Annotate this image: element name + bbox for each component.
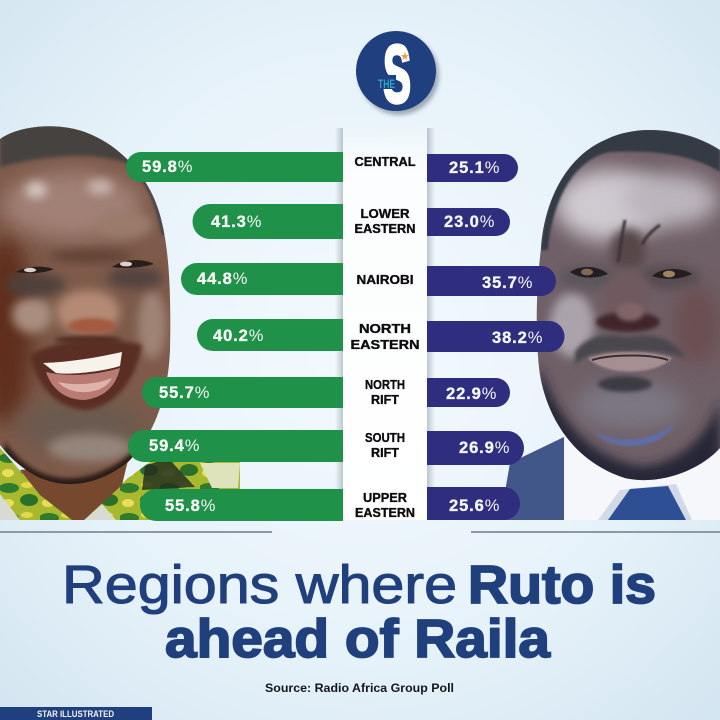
head: [0, 126, 170, 484]
bar: North Eastern Ruto: [197, 319, 343, 351]
label: Lower Eastern: [354, 207, 416, 236]
chart: Ruto bars (green): [126, 152, 343, 521]
shirt: [564, 430, 720, 520]
bar: Nairobi Ruto: 44.8%: [197, 270, 248, 288]
bar: Lower Eastern Ruto: 41.3%: [211, 213, 262, 231]
label: Upper Eastern: UPPER: [363, 491, 407, 505]
mouth: [30, 340, 142, 410]
head: [530, 120, 720, 490]
tie: [608, 486, 686, 520]
label: Central: CENTRAL: [354, 155, 416, 169]
label: North Eastern: [350, 322, 420, 352]
nose: [56, 290, 120, 334]
bar: North Rift Raila: [427, 378, 510, 407]
bar: North Rift Raila: 22.9%: [446, 385, 497, 403]
label: North Rift: RIFT: [371, 393, 399, 407]
title: Regions where: [62, 555, 457, 615]
moustache: [575, 335, 686, 365]
photo: William Ruto portrait: [0, 120, 240, 520]
label: South Rift: RIFT: [371, 446, 399, 460]
logo: The Star: S: [383, 29, 411, 120]
bar: North Eastern Raila: [427, 321, 564, 352]
credit bar: Star Illustrated: STAR ILLUSTRATED: [37, 709, 114, 719]
shirt: [0, 448, 240, 520]
label: Nairobi: NAIROBI: [356, 273, 414, 287]
bar: Nairobi Ruto: [181, 263, 343, 295]
bar: Upper Eastern Raila: 25.6%: [449, 497, 500, 515]
bar: Central Ruto: [126, 152, 343, 182]
label: Upper Eastern: [355, 491, 415, 520]
bar: North Eastern Ruto: 40.2%: [213, 327, 264, 345]
label: North Rift: [365, 378, 405, 407]
hair: [541, 129, 720, 250]
chart: Raila bars (navy): [427, 154, 564, 520]
credit bar: Star Illustrated: [0, 707, 152, 720]
label: Upper Eastern: EASTERN: [355, 506, 415, 520]
bar: Nairobi Raila: 35.7%: [482, 274, 533, 292]
bar: Lower Eastern Raila: [427, 208, 510, 236]
bar: Upper Eastern Ruto: [140, 489, 343, 521]
label: South Rift: [365, 431, 405, 460]
title: ahead of Raila: [165, 609, 551, 669]
label: North Eastern: EASTERN: [350, 338, 420, 352]
bar: Lower Eastern Ruto: [192, 204, 343, 239]
title: Ruto is: [468, 555, 656, 615]
bar: Central Raila: [427, 154, 518, 182]
label: Lower Eastern: LOWER: [360, 207, 410, 221]
eyes: [16, 267, 54, 273]
chin beard: [598, 376, 652, 392]
logo: The Star: THE: [378, 77, 395, 91]
bar: South Rift Ruto: [128, 430, 343, 462]
bar: North Rift Ruto: [142, 377, 343, 408]
bar: North Rift Ruto: 55.7%: [159, 384, 210, 402]
bar: South Rift Raila: [427, 431, 524, 465]
label: North Rift: NORTH: [365, 378, 405, 392]
bar: Central Raila: 25.1%: [449, 159, 500, 177]
bar: South Rift Ruto: 59.4%: [149, 437, 200, 455]
suit: [500, 437, 564, 520]
bar: Nairobi Raila: [427, 266, 556, 296]
region labels: [350, 155, 420, 520]
bar: Upper Eastern Raila: [427, 487, 520, 520]
label: North Eastern: NORTH: [359, 322, 411, 336]
lips: [588, 352, 672, 372]
panel: region labels column: [335, 125, 435, 520]
bar: North Eastern Raila: 38.2%: [492, 329, 543, 347]
bar: Lower Eastern Raila: 23.0%: [444, 213, 495, 231]
source note: Source: Radio Africa Group Poll: [265, 683, 454, 695]
logo: The Star: [356, 29, 439, 120]
logo: The Star: ★: [400, 51, 410, 63]
nose: [608, 268, 650, 287]
title: [62, 555, 656, 669]
label: South Rift: SOUTH: [365, 431, 405, 445]
bar: Central Ruto: 59.8%: [142, 158, 193, 176]
eyes: [570, 267, 608, 278]
photo: Raila Odinga portrait: [500, 120, 720, 520]
neck: [20, 460, 128, 520]
bar: Upper Eastern Ruto: 55.8%: [165, 497, 216, 515]
bar: South Rift Raila: 26.9%: [459, 439, 510, 457]
label: Lower Eastern: EASTERN: [354, 222, 416, 236]
